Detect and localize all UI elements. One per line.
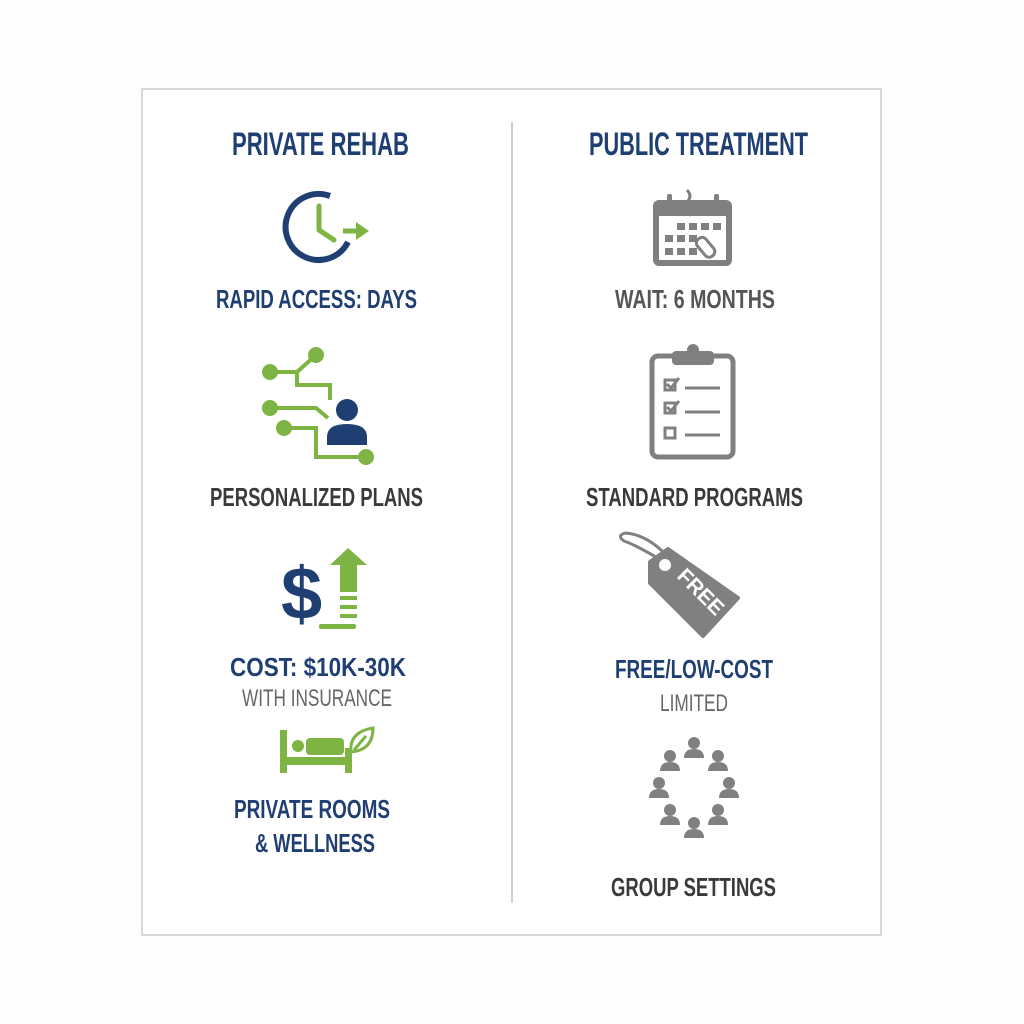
icon: dollar with up arrow: $ bbox=[281, 552, 322, 635]
label: private rooms: & WELLNESS bbox=[255, 828, 375, 858]
icon: bed with leaf bbox=[280, 728, 373, 773]
icon: clipboard bbox=[652, 344, 733, 457]
label: cost bbox=[230, 652, 406, 712]
label: private rooms: PRIVATE ROOMS bbox=[234, 794, 390, 824]
label: cost: COST: $10K-30K bbox=[230, 652, 406, 682]
label: wait: WAIT: 6 MONTHS bbox=[615, 284, 775, 314]
label: standard programs: STANDARD PROGRAMS bbox=[586, 482, 803, 512]
label: rapid access: RAPID ACCESS: DAYS bbox=[216, 284, 417, 314]
heading: private rehab: PRIVATE REHAB bbox=[232, 126, 409, 162]
label: free low cost bbox=[615, 654, 773, 717]
icon: group circle bbox=[649, 737, 739, 838]
icon: dollar with up arrow bbox=[281, 548, 367, 635]
panel: comparison frame bbox=[142, 89, 881, 935]
icon: price tag free bbox=[620, 533, 738, 636]
icon: price tag free: FREE bbox=[672, 564, 728, 620]
icon: clock with arrow bbox=[286, 194, 369, 260]
heading: public treatment: PUBLIC TREATMENT bbox=[589, 126, 808, 162]
label: free low cost: FREE/LOW-COST bbox=[615, 654, 773, 684]
icon: calendar bbox=[653, 190, 732, 266]
label: group settings: GROUP SETTINGS bbox=[611, 872, 776, 902]
label: private rooms bbox=[234, 794, 390, 858]
label: cost: WITH INSURANCE bbox=[242, 685, 392, 712]
label: free low cost: LIMITED bbox=[660, 690, 728, 717]
icon: personalized network bbox=[262, 347, 374, 465]
label: personalized plans: PERSONALIZED PLANS bbox=[210, 482, 423, 512]
